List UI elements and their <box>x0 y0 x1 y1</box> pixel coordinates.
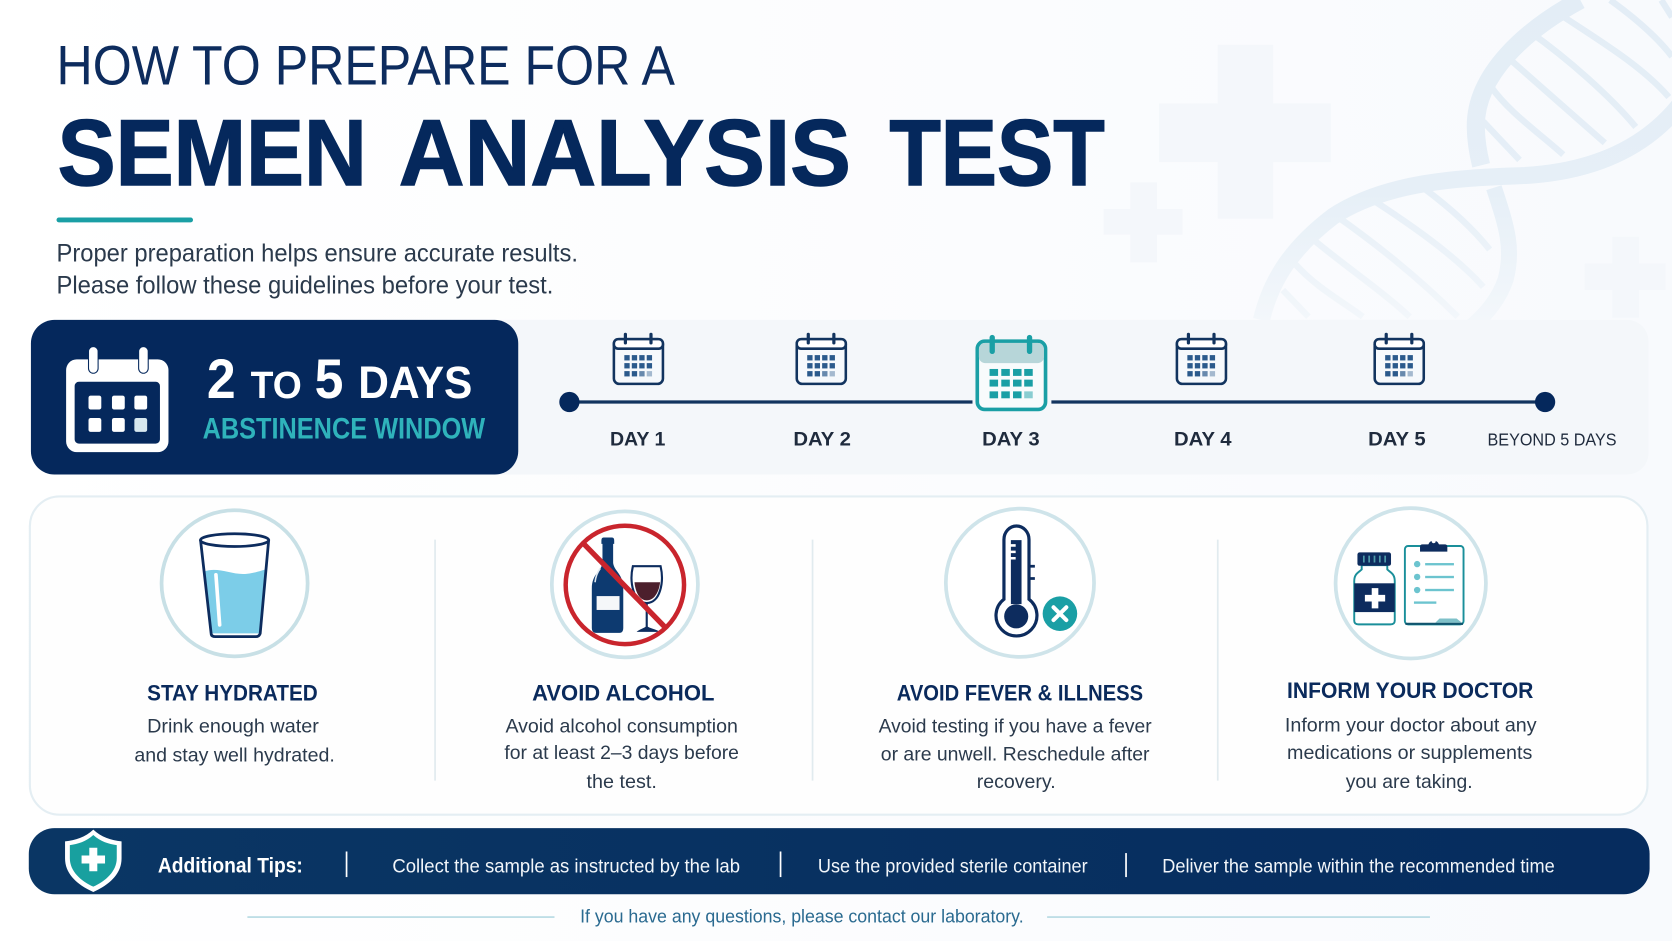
body text <box>134 716 335 766</box>
heading: INFORM YOUR DOCTOR <box>1287 678 1533 703</box>
body text: you are taking. <box>1346 771 1473 793</box>
day labels: DAY 4 <box>1174 429 1232 451</box>
accent bar <box>57 218 193 222</box>
body text: recovery. <box>977 771 1056 793</box>
icon: day 3 highlighted calendar <box>977 335 1046 409</box>
body text: the test. <box>586 771 657 793</box>
icon: water glass <box>162 510 308 656</box>
body text: or are unwell. Reschedule after <box>881 743 1150 765</box>
icon: day 5 calendar <box>1375 333 1424 384</box>
body text <box>879 716 1152 793</box>
icon: day 2 calendar <box>797 333 846 384</box>
timeline line <box>559 392 1555 412</box>
icon: thermometer with x badge <box>946 509 1094 657</box>
intro text <box>57 240 578 299</box>
tips label: Additional Tips: <box>158 853 303 877</box>
title: TEST <box>889 100 1105 205</box>
footer note: If you have any questions, please contact our laboratory. <box>580 906 1024 926</box>
heading: 2 to 5 days: TO <box>251 364 302 407</box>
body text: Avoid testing if you have a fever <box>879 716 1152 738</box>
icon: large calendar <box>66 347 168 452</box>
body text: and stay well hydrated. <box>134 744 335 766</box>
guideline: inform your doctor <box>1285 508 1537 793</box>
heading: STAY HYDRATED <box>147 681 318 706</box>
heading: 2 to 5 days: 5 <box>315 348 343 410</box>
panel: additional tips <box>29 828 1650 894</box>
intro text: Proper preparation helps ensure accurate results. <box>57 240 578 267</box>
heading: AVOID FEVER & ILLNESS <box>897 681 1143 706</box>
tip 2: Use the provided sterile container <box>818 856 1088 877</box>
guideline: avoid fever and illness <box>879 509 1152 793</box>
background decoration: crosses and DNA helix <box>1104 0 1672 328</box>
heading: 2 to 5 days: DAYS <box>358 356 472 408</box>
day labels: DAY 3 <box>982 429 1040 451</box>
body text <box>1285 715 1537 793</box>
heading: 2 to 5 days <box>207 348 472 410</box>
panel: abstinence timeline <box>480 320 1649 475</box>
heading: 2 to 5 days: 2 <box>207 348 236 410</box>
day labels: DAY 5 <box>1368 429 1426 451</box>
title: HOW TO PREPARE FOR A <box>57 34 675 96</box>
body text: medications or supplements <box>1287 742 1532 764</box>
intro text: Please follow these guidelines before your test. <box>57 272 553 299</box>
guideline: avoid alcohol <box>504 511 739 793</box>
tip 1: Collect the sample as instructed by the lab <box>392 856 740 877</box>
body text: for at least 2–3 days before <box>504 742 739 764</box>
day labels: BEYOND 5 DAYS <box>1488 430 1617 450</box>
icon: medicine bottle and clipboard <box>1336 508 1486 658</box>
day labels: DAY 2 <box>793 429 851 451</box>
day labels <box>610 429 1617 451</box>
icon: no alcohol <box>552 511 698 657</box>
body text: Drink enough water <box>147 716 319 738</box>
title: ANALYSIS <box>399 100 851 205</box>
panel: guidelines <box>30 496 1647 815</box>
body text <box>504 716 739 793</box>
subheading: ABSTINENCE WINDOW <box>203 412 485 445</box>
heading: AVOID ALCOHOL <box>532 681 714 706</box>
day labels: DAY 1 <box>610 429 665 451</box>
guideline: stay hydrated <box>134 510 335 766</box>
body text: Avoid alcohol consumption <box>505 716 738 738</box>
icon: day 4 calendar <box>1177 333 1226 384</box>
icon: day 1 calendar <box>614 333 663 384</box>
icon: shield <box>65 830 122 892</box>
panel: 2 to 5 days abstinence window <box>31 320 518 475</box>
title: SEMEN <box>58 100 367 205</box>
title <box>57 34 1105 205</box>
body text: Inform your doctor about any <box>1285 715 1537 737</box>
tip 3: Deliver the sample within the recommended time <box>1162 856 1555 877</box>
